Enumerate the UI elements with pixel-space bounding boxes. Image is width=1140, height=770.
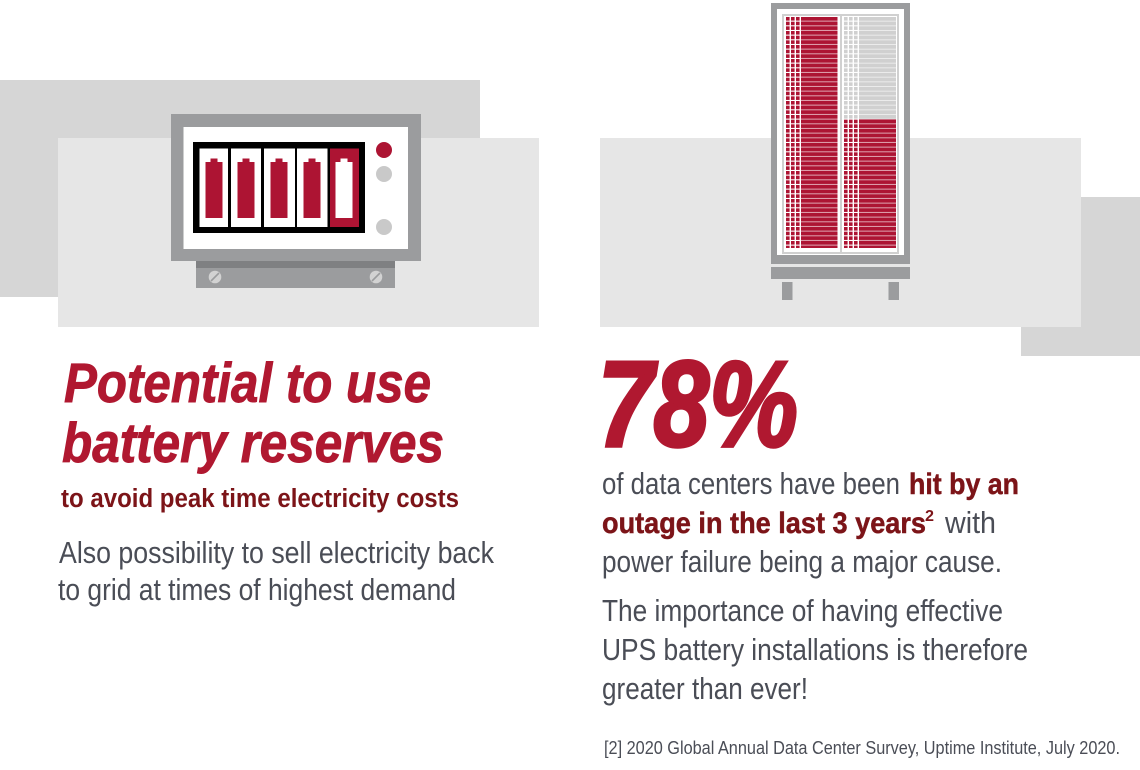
text block: outage statistic <box>602 466 1019 579</box>
icon: UPS server rack <box>771 3 910 300</box>
big number: 78%: 78% <box>598 336 798 472</box>
icon: battery control cabinet <box>171 114 421 288</box>
heading: potential to use battery reserves: battery reserves <box>62 411 444 474</box>
panel: right background blocks <box>600 138 1140 356</box>
text block: outage statistic: 2 <box>925 508 934 525</box>
text block: sell electricity back <box>58 535 494 607</box>
heading: potential to use battery reserves <box>62 351 444 474</box>
text block: UPS importance: The importance of having effective <box>602 593 1003 628</box>
text block: sell electricity back: to grid at times of highest demand <box>58 572 456 607</box>
text block: UPS importance <box>602 593 1028 706</box>
subheading: peak time costs: to avoid peak time electricity costs <box>61 485 459 513</box>
text block: outage statistic: with <box>944 505 996 540</box>
panel: left background blocks <box>0 80 539 327</box>
text block: outage statistic: outage in the last 3 years <box>602 507 926 540</box>
heading: potential to use battery reserves: Potential to use <box>64 351 431 414</box>
text block: outage statistic: hit by an <box>909 468 1019 501</box>
text block: sell electricity back: Also possibility to sell electricity back <box>59 535 494 570</box>
text block: outage statistic: power failure being a major cause. <box>602 544 1002 579</box>
text block: UPS importance: greater than ever! <box>602 671 808 706</box>
text block: outage statistic: of data centers have been <box>602 466 900 501</box>
text block: UPS importance: UPS battery installations is therefore <box>602 632 1028 667</box>
